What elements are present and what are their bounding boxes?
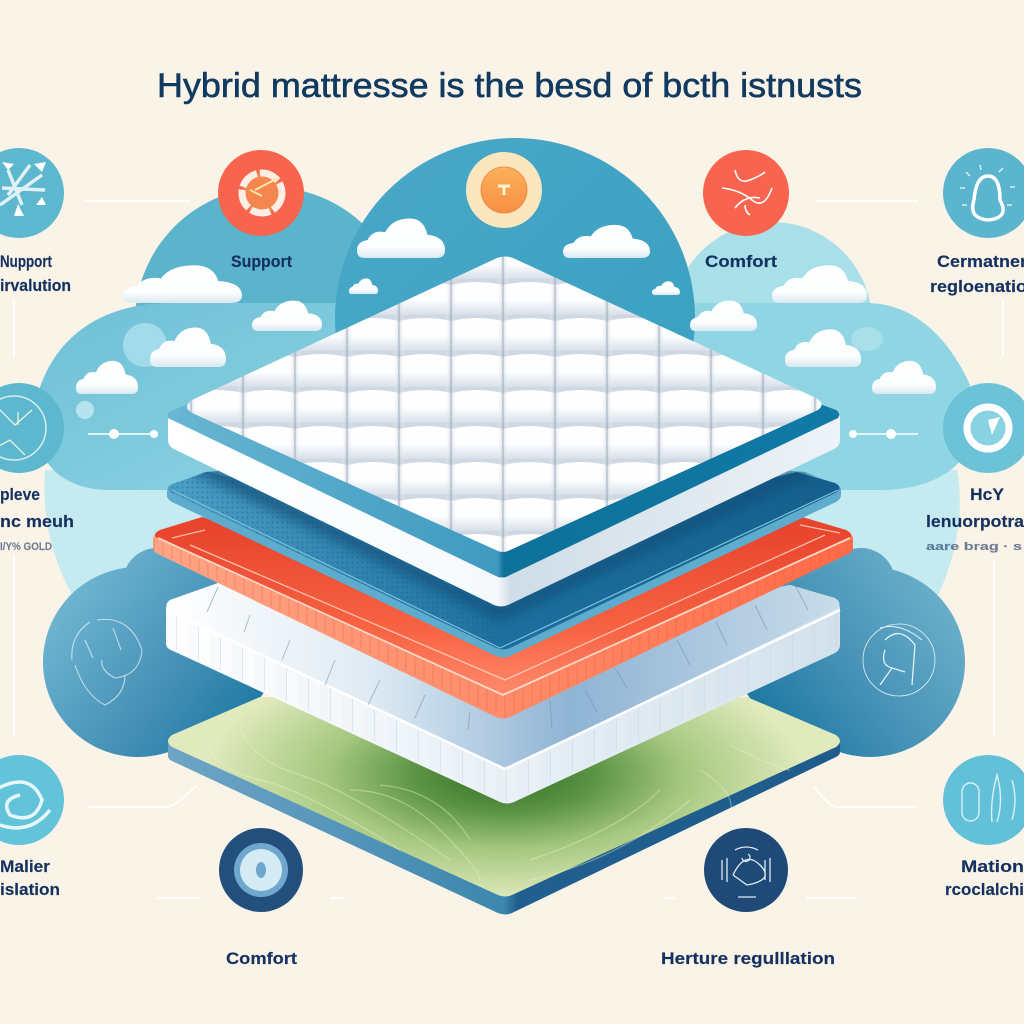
- labels: HcY: [970, 485, 1005, 504]
- icon: dial left: [0, 383, 64, 473]
- labels: I/Y% GOLD: [0, 541, 52, 553]
- labels: Nupport: [0, 252, 52, 271]
- icon: sketch right blob: [863, 624, 935, 696]
- icon: swirl lower left: [0, 755, 64, 845]
- title: Hybrid mattresse is the besd of bcth istnusts: [157, 67, 862, 105]
- labels: Mation: [961, 857, 1024, 876]
- labels: [0, 252, 1024, 968]
- layer: top quilted comfort mattress: [167, 250, 840, 606]
- icon: target right: [943, 383, 1024, 473]
- labels: aare brag · s: [926, 541, 1022, 553]
- layer: coral foam: [153, 517, 853, 718]
- clouds: [76, 218, 936, 394]
- labels: nc meuh: [0, 512, 74, 531]
- white mattress side: [168, 416, 840, 606]
- labels: lenuorpotra: [926, 512, 1024, 531]
- icon: thermometer top right: [943, 148, 1024, 238]
- blue border band: [167, 404, 839, 578]
- icon: temperature regulation lower: [704, 828, 788, 912]
- labels: Support: [231, 252, 292, 271]
- icon: coral support: [218, 150, 304, 236]
- labels: irvalution: [0, 276, 71, 295]
- icon: snowflake top left: [0, 148, 64, 238]
- icon: capsules lower right: [943, 755, 1024, 845]
- quilted top: [180, 250, 830, 560]
- labels: Herture regulllation: [661, 949, 835, 968]
- background cloud shapes: [40, 138, 970, 757]
- labels: Comfort: [226, 949, 297, 968]
- layer: blue gel memory foam: [167, 470, 841, 658]
- icon: centre medallion: [466, 152, 542, 228]
- labels: Comfort: [705, 252, 777, 271]
- icon: sketch left blob: [72, 619, 142, 705]
- labels: rcoclalchi: [945, 880, 1024, 899]
- labels: Malier: [0, 857, 50, 876]
- icon: comfort lower: [219, 828, 303, 912]
- layer: green latex base: [168, 697, 840, 914]
- connector lines: [14, 201, 1003, 898]
- icon: coral comfort: [703, 150, 789, 236]
- labels: Cermatner: [937, 252, 1024, 271]
- layer: white pocket spring mattress: [166, 583, 840, 804]
- labels: islation: [0, 880, 60, 899]
- labels: regloenatio: [930, 277, 1024, 296]
- labels: pleve: [0, 485, 40, 504]
